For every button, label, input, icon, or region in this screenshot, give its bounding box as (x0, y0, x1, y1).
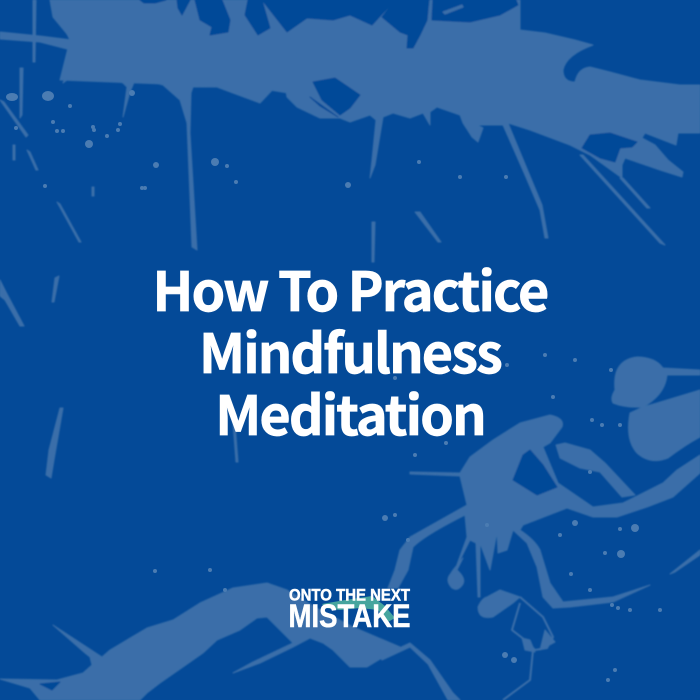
top band dark holes (140, 0, 637, 162)
droplet (448, 558, 464, 589)
top band left part (50, 0, 420, 110)
right side: big blob (629, 390, 700, 461)
lower right loop (512, 597, 553, 650)
logo (288, 586, 411, 632)
right side: top blob (612, 357, 700, 407)
large splatter: top band (0, 0, 700, 250)
drip lines under the top band (580, 155, 665, 245)
title: Meditation (215, 372, 485, 451)
logo brush accent (322, 596, 395, 622)
thin tail (380, 643, 460, 700)
second ray (556, 443, 635, 497)
large splatter: bottom left (0, 583, 400, 700)
title: Mindfulness (199, 310, 501, 389)
right side: main splash (388, 415, 700, 608)
logo wordmark (288, 586, 411, 634)
main splash hole (513, 450, 557, 495)
title: How To Practice (153, 248, 547, 327)
lower right blob (478, 590, 520, 618)
title (153, 248, 548, 451)
small splatter droplets (6, 90, 662, 682)
light streaks over dark holes at top (428, 0, 432, 20)
